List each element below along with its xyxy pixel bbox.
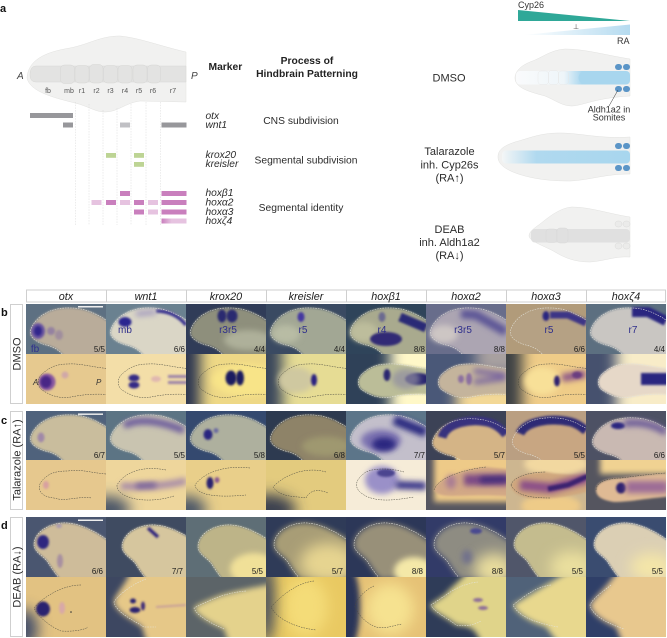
process column: Segmental identity	[259, 203, 344, 214]
hoxz4 lateral: 5/5	[652, 567, 664, 576]
gradients: Cyp26 and RA	[518, 0, 630, 46]
column headers: wnt1	[135, 291, 157, 303]
hoxz4 lateral	[586, 304, 666, 354]
kreisler lateral	[266, 517, 346, 577]
column headers: krox20	[210, 291, 242, 303]
hoxa3 lateral	[506, 517, 586, 577]
row d: DEAB dorsal	[10, 557, 667, 638]
marker column: kreisler	[206, 159, 239, 170]
wnt1 dorsal	[106, 354, 186, 404]
hoxz4 lateral: r7	[629, 325, 638, 336]
krox20 lateral: 4/4	[254, 345, 266, 354]
column headers: otx	[59, 291, 74, 303]
marker column: Marker	[208, 62, 242, 73]
Talarazole condition label: Talarazole	[424, 146, 475, 158]
marker column: otx	[206, 111, 220, 122]
otx lateral	[26, 517, 106, 577]
panel: a	[0, 0, 630, 262]
otx dorsal	[26, 354, 106, 404]
krox20 dorsal	[186, 460, 266, 510]
hoxb1 lateral	[346, 411, 426, 460]
row label: DEAB	[10, 518, 24, 636]
krox20 lateral: r3r5	[219, 325, 237, 336]
panel letters b c d: c	[1, 415, 7, 427]
marker column: hoxα3	[206, 207, 234, 218]
kreisler dorsal	[258, 557, 346, 638]
marker column: hoxβ1	[206, 188, 233, 199]
krox20 lateral	[186, 411, 266, 460]
hoxz4 lateral	[586, 517, 666, 577]
hoxb1 lateral: r4	[378, 325, 387, 336]
hoxa3 dorsal	[506, 460, 586, 510]
DMSO embryo schematic: Aldh1a2 in	[588, 104, 630, 114]
hindbrain schematic: r7	[170, 88, 176, 95]
hoxb1 dorsal	[332, 562, 426, 638]
otx lateral: fb	[31, 344, 40, 355]
otx lateral: 5/5	[94, 345, 106, 354]
process column: CNS subdivision	[263, 116, 339, 127]
hoxb1 lateral: 7/7	[414, 451, 425, 460]
process column: Segmental subdivision	[254, 156, 358, 166]
row label: DMSO	[10, 304, 24, 404]
hoxa2 dorsal	[426, 354, 506, 404]
hindbrain schematic: fb	[45, 88, 51, 95]
krox20 lateral	[186, 517, 266, 577]
hindbrain schematic: r4	[122, 88, 128, 95]
marker column: hoxα2	[206, 198, 234, 208]
hoxz4 lateral: 6/6	[654, 451, 666, 460]
DEAB condition label: DEAB	[435, 224, 464, 236]
hoxz4 dorsal	[586, 567, 667, 638]
krox20 lateral: 5/5	[252, 567, 264, 576]
hoxb1 lateral	[346, 304, 426, 354]
row label: DEAB: DEAB (RA↓)	[12, 546, 24, 608]
row d: DEAB lateral	[26, 517, 667, 585]
wnt1 lateral	[106, 304, 186, 354]
marker column: hoxζ4	[206, 216, 233, 227]
kreisler lateral	[266, 411, 346, 460]
hoxa2 lateral: 5/7	[494, 451, 505, 460]
kreisler dorsal	[266, 354, 346, 404]
gradients: Cyp26 and RA: Cyp26	[518, 0, 544, 10]
hoxa3 lateral	[506, 411, 586, 460]
DMSO condition label: DMSO	[432, 72, 466, 84]
expression bars	[30, 113, 186, 224]
hoxa3 lateral: 6/6	[574, 345, 586, 354]
wnt1 dorsal	[106, 460, 186, 510]
row label: DMSO: DMSO	[12, 337, 24, 370]
hoxb1 lateral: 8/8	[412, 567, 424, 576]
hindbrain schematic: mb	[64, 88, 74, 95]
krox20 lateral	[186, 304, 266, 354]
hoxb1 lateral: 8/8	[414, 345, 426, 354]
wnt1 lateral: 7/7	[172, 567, 184, 576]
hoxa3 dorsal	[506, 354, 586, 404]
column headers: hoxα2	[451, 291, 481, 303]
process column: Process of	[281, 56, 334, 67]
row c: Talarazole dorsal	[26, 440, 667, 526]
hindbrain schematic: r6	[150, 88, 156, 95]
gradients: Cyp26 and RA: RA	[617, 36, 630, 46]
hoxa2 lateral	[426, 411, 506, 460]
kreisler lateral: r5	[299, 325, 308, 336]
hindbrain schematic	[16, 36, 198, 112]
kreisler lateral: 5/7	[332, 567, 344, 576]
marker column: wnt1	[206, 120, 227, 131]
hoxa3 lateral: 5/5	[574, 451, 586, 460]
row c: Talarazole lateral	[26, 411, 667, 472]
hoxz4 lateral	[586, 411, 666, 460]
column headers: kreisler	[289, 291, 324, 303]
hindbrain schematic: r1	[79, 88, 85, 95]
column headers: hoxζ4	[612, 291, 640, 303]
otx lateral	[26, 304, 106, 355]
process column	[254, 56, 358, 214]
hindbrain schematic: r5	[136, 88, 142, 95]
otx dorsal: P	[96, 378, 102, 387]
krox20 dorsal	[186, 354, 266, 404]
column headers	[26, 290, 666, 303]
hindbrain schematic: r2	[93, 88, 100, 95]
hoxa3 lateral	[506, 304, 586, 354]
otx lateral: 6/6	[92, 567, 104, 576]
wnt1 dorsal	[106, 567, 196, 638]
hoxa2 lateral: r3r5	[454, 325, 472, 336]
hindbrain schematic: P	[191, 71, 198, 82]
hoxa3 lateral: 5/5	[572, 567, 584, 576]
krox20 lateral: 5/8	[254, 451, 266, 460]
otx dorsal: A	[32, 378, 38, 387]
hoxz4 dorsal	[586, 460, 666, 510]
Talarazole condition label: (RA↑)	[435, 172, 464, 184]
hoxz4 dorsal	[586, 354, 666, 404]
process column: Hindbrain Patterning	[256, 69, 358, 80]
Talarazole embryo schematic	[498, 133, 630, 181]
hindbrain schematic: A	[16, 71, 24, 82]
hoxa2 lateral	[426, 304, 506, 354]
row b: DMSO dorsal	[26, 334, 667, 432]
wnt1 lateral: 6/6	[174, 345, 186, 354]
row label: Talarazole: Talarazole (RA↑)	[12, 419, 24, 501]
DEAB condition label: inh. Aldh1a2	[419, 237, 480, 249]
kreisler lateral: 4/4	[334, 345, 346, 354]
hoxa3 dorsal	[506, 567, 596, 638]
wnt1 lateral: 5/5	[174, 451, 186, 460]
hoxa2 lateral: 8/8	[494, 345, 506, 354]
column headers: hoxβ1	[371, 291, 401, 303]
column headers: hoxα3	[531, 291, 561, 303]
marker column	[206, 62, 242, 227]
Talarazole condition label: inh. Cyp26s	[420, 160, 479, 172]
hoxb1 lateral	[346, 517, 426, 577]
otx lateral: 6/7	[94, 451, 105, 460]
panel letter a: a	[0, 3, 7, 15]
DEAB embryo schematic	[529, 207, 630, 262]
DMSO embryo schematic: Somites	[593, 112, 626, 122]
krox20 dorsal	[186, 577, 276, 638]
kreisler lateral	[266, 304, 346, 354]
hoxa3 lateral: r5	[545, 325, 554, 336]
hoxa2 lateral	[426, 517, 506, 577]
row b: DMSO lateral	[26, 304, 667, 362]
hoxa2 dorsal	[426, 567, 516, 638]
hoxb1 dorsal	[346, 460, 426, 510]
hoxz4 lateral: 4/4	[654, 345, 666, 354]
DMSO embryo schematic	[515, 49, 630, 122]
kreisler lateral: 6/8	[334, 451, 346, 460]
wnt1 lateral: mb	[118, 325, 132, 336]
kreisler dorsal	[266, 460, 346, 510]
wnt1 lateral	[106, 517, 186, 577]
hoxa2 lateral: 8/8	[492, 567, 504, 576]
otx lateral	[26, 411, 106, 460]
otx dorsal	[26, 460, 106, 510]
hoxa2 dorsal	[426, 460, 506, 510]
marker column: krox20	[206, 150, 236, 161]
panel letters b c d: d	[1, 520, 8, 532]
gradients: Cyp26 and RA: ⊥	[573, 24, 579, 31]
panel letters b c d	[1, 307, 8, 532]
DEAB condition label: (RA↓)	[435, 250, 464, 262]
otx dorsal	[10, 577, 106, 638]
panel letters b c d: b	[1, 307, 8, 319]
hoxb1 dorsal	[346, 354, 426, 404]
wnt1 lateral	[106, 411, 186, 460]
hindbrain schematic: r3	[107, 88, 114, 95]
